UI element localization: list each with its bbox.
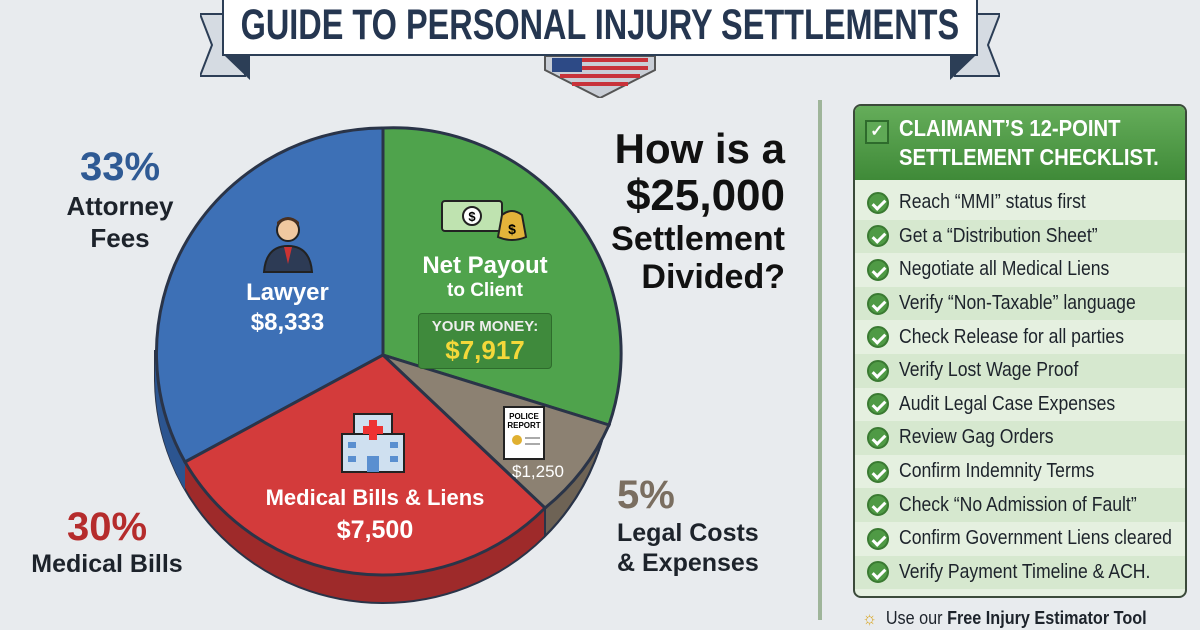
checklist items: Review Gag Orders — [899, 426, 1054, 448]
heading: question: $25,000 — [626, 171, 785, 220]
heading: question: How is a — [615, 125, 785, 172]
icon: money — [441, 200, 528, 241]
label: lawyer: Lawyer — [246, 279, 329, 306]
panel: checklist — [853, 104, 1187, 598]
checklist items: Audit Legal Case Expenses — [899, 393, 1115, 415]
label: lawyer: $8,333 — [251, 309, 324, 336]
label: 5% legal: Legal Costs — [617, 519, 759, 547]
label: 30% medical — [31, 505, 183, 578]
checklist header: CLAIMANT’S 12-POINT — [899, 115, 1121, 141]
checklist items: Negotiate all Medical Liens — [899, 258, 1109, 280]
checklist items: Confirm Indemnity Terms — [899, 460, 1094, 482]
checklist items: Get a “Distribution Sheet” — [899, 225, 1098, 247]
icon: money: $ — [468, 209, 476, 224]
label: 5% legal: 5% — [617, 473, 675, 517]
icon: lawyer — [262, 217, 314, 273]
callout: your money — [418, 313, 552, 369]
divider — [818, 100, 822, 620]
label: medical: Medical Bills & Liens — [266, 485, 484, 510]
checklist items: Verify Lost Wage Proof — [899, 359, 1078, 381]
label: lawyer — [246, 279, 329, 336]
heading: question — [611, 125, 786, 296]
icon: police report — [503, 406, 545, 460]
checklist header: ✓ — [870, 123, 884, 140]
icon: police report: POLICE — [509, 412, 540, 421]
heading: question: Settlement — [611, 220, 785, 258]
label: net payout — [422, 252, 548, 301]
footer cta: ☼ Use our Free Injury Estimator Tool — [862, 608, 1147, 628]
label: 33% attorney: 33% — [80, 145, 160, 189]
title banner: GUIDE TO PERSONAL INJURY SETTLEMENTS — [241, 1, 959, 49]
label: 30% medical: 30% — [67, 505, 147, 549]
label: 33% attorney — [67, 145, 174, 253]
icon: police report: REPORT — [507, 421, 541, 430]
callout: your money: YOUR MONEY: — [432, 318, 538, 335]
label: 30% medical: Medical Bills — [31, 550, 183, 578]
checklist items: Check Release for all parties — [899, 326, 1124, 348]
checklist items: Verify “Non-Taxable” language — [899, 292, 1136, 314]
checklist items — [855, 191, 1185, 589]
label: 33% attorney: Fees — [90, 223, 150, 253]
checklist items: Check “No Admission of Fault” — [899, 494, 1137, 516]
icon: hospital — [341, 413, 405, 473]
checklist items: Confirm Government Liens cleared — [899, 527, 1172, 549]
label: medical: $7,500 — [337, 516, 413, 544]
checklist header — [855, 106, 1185, 180]
title banner — [200, 0, 1000, 98]
label: 5% legal — [617, 473, 759, 577]
label: 5% legal: & Expenses — [617, 549, 759, 577]
label: net payout: to Client — [447, 280, 523, 301]
checklist items: Reach “MMI” status first — [899, 191, 1086, 213]
heading: question: Divided? — [641, 258, 785, 296]
label: medical — [266, 485, 484, 544]
checklist items: Verify Payment Timeline & ACH. — [899, 561, 1150, 583]
label: net payout: Net Payout — [422, 252, 548, 279]
icon: money: $ — [508, 221, 516, 237]
callout: your money: $7,917 — [445, 335, 525, 365]
pie chart — [154, 126, 623, 604]
label: legal costs amount: $1,250 — [512, 462, 564, 481]
label: 33% attorney: Attorney — [67, 191, 173, 221]
checklist header: SETTLEMENT CHECKLIST. — [899, 144, 1159, 170]
